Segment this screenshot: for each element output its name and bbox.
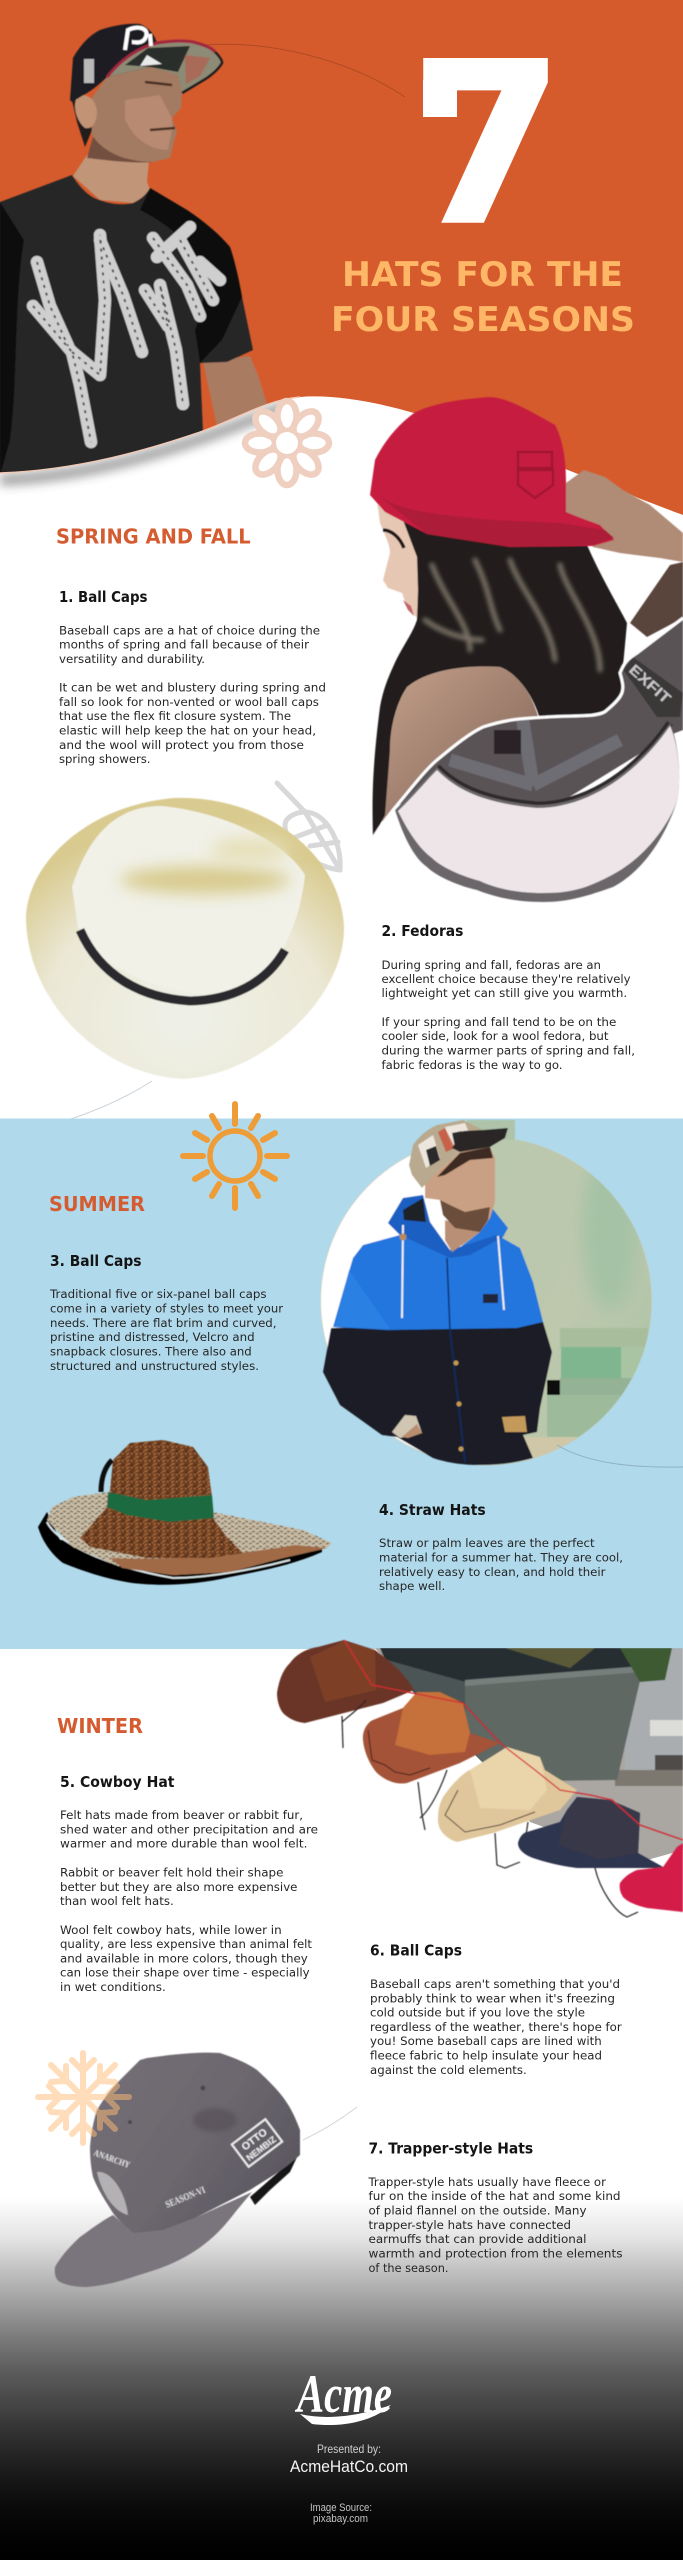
heading: 5. cowboy hat: 5. Cowboy Hat bbox=[60, 1773, 174, 1791]
photo: woman in red cap bbox=[370, 397, 683, 902]
hair highlights bbox=[425, 560, 600, 670]
jacket upper blue bbox=[333, 1195, 543, 1330]
cowboy hats on a line bbox=[277, 1640, 683, 1917]
body text: ball caps: It can be wet and blustery during spring and bbox=[59, 682, 326, 695]
hero title: HATS FOR THE bbox=[342, 255, 623, 295]
jacket placket bbox=[447, 1258, 465, 1462]
body text: straw hats: Straw or palm leaves are the perfect bbox=[379, 1537, 595, 1550]
body text: straw hats: material for a summer hat. They are cool, bbox=[379, 1551, 623, 1564]
body text: fedoras: fabric fedoras is the way to go. bbox=[382, 1059, 562, 1072]
cap logo bbox=[125, 28, 151, 50]
green wall bbox=[462, 1139, 652, 1464]
man's face bbox=[90, 67, 182, 162]
body text: trapper-style hats: earmuffs that can provide additional bbox=[368, 2233, 586, 2246]
cap eyelets bbox=[128, 2086, 206, 2124]
decorative arc right bbox=[557, 1445, 683, 1467]
man's ear bbox=[75, 95, 97, 128]
fedora brim bbox=[26, 798, 344, 1079]
hat 1 brown bbox=[277, 1640, 414, 1723]
cap dark brim bbox=[452, 1128, 508, 1152]
body text: fedoras: lightweight yet can still give you warmth. bbox=[382, 987, 627, 1000]
body text: trapper-style hats: Trapper-style hats usually have fleece or bbox=[367, 2176, 606, 2189]
hat 3 beige bbox=[438, 1747, 577, 1842]
fedora ribbon band bbox=[80, 930, 285, 1001]
grey cap season text: SEASON-VI bbox=[164, 2185, 207, 2211]
body text: winter ball caps bbox=[370, 1978, 622, 2077]
body text: ball caps: spring showers. bbox=[59, 753, 150, 766]
body text: winter ball caps: regardless of the weather, there's hope for bbox=[370, 2021, 622, 2034]
body text: winter ball caps: against the cold elements. bbox=[370, 2064, 527, 2077]
presented by: Presented by: bbox=[317, 2442, 381, 2456]
jacket lower black bbox=[323, 1322, 552, 1465]
black t-shirt bbox=[0, 175, 253, 476]
hat 1 chin strap bbox=[342, 1700, 366, 1748]
jacket pocket patch bbox=[483, 1294, 498, 1303]
photo: straw hat bbox=[38, 1440, 332, 1585]
flexfit band label: EXFIT bbox=[625, 661, 674, 707]
hat 5 red bbox=[620, 1843, 683, 1912]
body text: ball caps: that use the flex fit closure system. The bbox=[59, 710, 291, 723]
body text: fedoras bbox=[382, 959, 635, 1072]
body text: summer ball caps: snapback closures. There also and bbox=[50, 1346, 252, 1359]
body text: fedoras: If your spring and fall tend to be on the bbox=[382, 1016, 616, 1029]
hero orange background bbox=[0, 0, 683, 515]
body text: trapper-style hats: fur on the inside of the hat and some kind bbox=[368, 2190, 620, 2203]
website: AcmeHatCo.com bbox=[290, 2457, 408, 2476]
string toggle bbox=[400, 1234, 406, 1240]
woman's hand bbox=[566, 470, 683, 562]
body text: ball caps: fall so look for non-vented or wool ball caps bbox=[59, 696, 319, 709]
body text: summer ball caps: come in a variety of styles to meet your bbox=[50, 1302, 283, 1316]
grey cap shadow bbox=[250, 2155, 298, 2205]
t-shirt script lettering bbox=[33, 227, 220, 442]
red rope bbox=[344, 1640, 683, 1840]
straw hat shadow bbox=[38, 1512, 322, 1585]
wave rim line bbox=[0, 397, 300, 473]
woman's raised arm bbox=[630, 562, 683, 637]
panel: spring and fall bbox=[0, 397, 683, 1132]
man's neck bbox=[445, 1220, 480, 1252]
photo: man in blue jacket (circle) bbox=[320, 1120, 667, 1470]
icon: flower bbox=[245, 401, 329, 485]
hat 2 zig-zag stitch bbox=[368, 1730, 430, 1775]
man's cap crown bbox=[70, 24, 157, 102]
man's arm bbox=[203, 356, 267, 426]
heading: 6. ball caps: 6. Ball Caps bbox=[370, 1942, 462, 1960]
section title: summer: SUMMER bbox=[49, 1192, 145, 1216]
hat 2 chin strap bbox=[418, 1770, 447, 1830]
section title: winter: WINTER bbox=[57, 1714, 143, 1738]
decorative arc bbox=[205, 44, 405, 97]
straw hat green band bbox=[107, 1492, 214, 1522]
crown highlight bbox=[193, 2108, 237, 2132]
body text: ball caps: months of spring and fall because of their bbox=[59, 639, 309, 652]
circle background bbox=[320, 1137, 652, 1465]
hero title: FOUR SEASONS bbox=[331, 300, 635, 340]
body text: cowboy hat bbox=[60, 1809, 318, 1994]
gold watch bbox=[502, 1416, 527, 1432]
heading: 4. straw hats: 4. Straw Hats bbox=[379, 1501, 486, 1519]
grey cap brim bbox=[55, 2192, 252, 2287]
photo: man in black tee and cap bbox=[0, 24, 267, 476]
man's cap brim bbox=[107, 41, 222, 93]
jacket strings bbox=[402, 1225, 504, 1318]
grey cap patch: NEMBIZ bbox=[244, 2134, 278, 2163]
heading: 1. ball caps: 1. Ball Caps bbox=[59, 588, 148, 606]
body text: ball caps: versatility and durability. bbox=[59, 653, 205, 666]
brim lower rim bbox=[110, 1545, 327, 1575]
body text: winter ball caps: probably think to wear when it's freezing bbox=[370, 1993, 615, 2006]
sweatband with size tag bbox=[623, 657, 683, 717]
panel: hero header bbox=[0, 0, 683, 515]
heading: 2. fedoras: 2. Fedoras bbox=[382, 922, 463, 940]
straw hat brim bbox=[47, 1492, 332, 1575]
body text: cowboy hat: shed water and other precipitation and are bbox=[60, 1824, 318, 1837]
image source: Image Source: bbox=[310, 2502, 372, 2514]
body text: cowboy hat: and available in more colors, though they bbox=[60, 1953, 308, 1966]
body text: straw hats: shape well. bbox=[379, 1580, 445, 1593]
cap inner tag bbox=[494, 730, 521, 754]
body text: cowboy hat: Wool felt cowboy hats, while lower in bbox=[60, 1924, 282, 1937]
cap panel stitches bbox=[450, 715, 620, 785]
patterned cap crown bbox=[409, 1120, 490, 1188]
grey cap crown bbox=[90, 2053, 300, 2233]
heading: 7. trapper-style hats: 7. Trapper-style Hats bbox=[368, 2140, 533, 2158]
body text: fedoras: during the warmer parts of spring and fall, bbox=[382, 1044, 635, 1058]
man's neck bbox=[73, 150, 151, 203]
body text: summer ball caps: Traditional five or six-panel ball caps bbox=[49, 1288, 267, 1301]
body text: fedoras: cooler side, look for a wool fedora, but bbox=[382, 1030, 609, 1043]
man's face bbox=[425, 1147, 495, 1232]
body text: trapper-style hats: warmth and protection from the elements bbox=[368, 2248, 623, 2261]
hat 3 zig-zag stitch bbox=[445, 1790, 535, 1832]
panel: summer bbox=[0, 1104, 683, 1649]
body text: cowboy hat: Felt hats made from beaver or rabbit fur, bbox=[60, 1809, 303, 1822]
red cap brim bbox=[378, 495, 614, 547]
body text: summer ball caps: pristine and distressed, Velcro and bbox=[50, 1331, 255, 1344]
summer blue background bbox=[0, 1118, 683, 1649]
photo: street planter behind hats bbox=[375, 1648, 683, 1868]
body text: winter ball caps: you! Some baseball caps are lined with bbox=[370, 2035, 602, 2048]
big number 7: 7 bbox=[409, 14, 565, 275]
hero title bbox=[331, 255, 635, 340]
panel: winter bbox=[0, 1640, 683, 2560]
grey cap patch bbox=[232, 2119, 282, 2167]
grey cap patch: OTTO bbox=[239, 2126, 270, 2153]
hat 3 chin strap bbox=[495, 1822, 528, 1868]
image source bbox=[310, 2502, 372, 2525]
sweat band along brim bbox=[437, 723, 670, 805]
woman's bare back bbox=[382, 666, 540, 822]
body text: cowboy hat: warmer and more durable than wool felt. bbox=[60, 1838, 307, 1851]
panel: footer gradient bbox=[0, 2190, 683, 2560]
icon: leaf bbox=[277, 783, 340, 870]
panel: footer branding bbox=[290, 2364, 408, 2525]
heading: 3. ball caps: 3. Ball Caps bbox=[50, 1252, 142, 1270]
body text: winter ball caps: Baseball caps aren't something that you'd bbox=[370, 1978, 620, 1991]
decorative arc near trapper heading bbox=[303, 2107, 357, 2140]
body text: cowboy hat: in wet conditions. bbox=[60, 1981, 166, 1994]
photo: straw fedora bbox=[26, 798, 344, 1079]
white rim edge bbox=[47, 1522, 290, 1578]
body text: straw hats bbox=[379, 1537, 623, 1593]
body text: cowboy hat: quality, are less expensive than animal felt bbox=[60, 1938, 313, 1951]
body text: winter ball caps: cold outside but if you love the style bbox=[370, 2007, 585, 2020]
cap underside interior bbox=[397, 618, 683, 815]
grey cap emblem bbox=[92, 2147, 132, 2215]
body text: cowboy hat: better but they are also more expensive bbox=[60, 1881, 298, 1894]
straw hat crown bbox=[80, 1440, 243, 1558]
straw hat strap bbox=[101, 1460, 112, 1492]
body text: ball caps bbox=[59, 624, 326, 766]
wall gap between arm and body bbox=[369, 1358, 377, 1384]
photo: grey ball cap bbox=[55, 2053, 300, 2287]
body text: fedoras: excellent choice because they're relatively bbox=[382, 973, 631, 986]
body text: cowboy hat: Rabbit or beaver felt hold their shape bbox=[60, 1867, 284, 1880]
woman's hair bbox=[373, 520, 627, 838]
icon: sun bbox=[183, 1104, 287, 1208]
body text: trapper-style hats: of the season. bbox=[368, 2262, 448, 2275]
body text: trapper-style hats: of plaid flannel on the outside. Many bbox=[368, 2205, 587, 2218]
hat 2 orange bbox=[363, 1692, 500, 1783]
decorative arc left bbox=[0, 1081, 152, 1132]
wave shadow bbox=[0, 407, 285, 480]
wave divider bbox=[373, 618, 683, 838]
cap shield logo bbox=[518, 452, 553, 498]
lettering texture bbox=[33, 235, 213, 442]
body text: trapper-style hats: trapper-style hats have connected bbox=[368, 2219, 571, 2232]
body text: ball caps: elastic will help keep the hat on your head, bbox=[59, 724, 316, 737]
body text: cowboy hat: than wool felt hats. bbox=[60, 1895, 174, 1908]
woman's face bbox=[377, 500, 440, 618]
red cap crown bbox=[370, 397, 614, 547]
body text: fedoras: During spring and fall, fedoras are an bbox=[382, 959, 601, 972]
fedora crown bbox=[72, 806, 305, 994]
jacket snaps bbox=[454, 1360, 464, 1452]
back hair bbox=[72, 100, 92, 147]
body text: winter ball caps: fleece fabric to help insulate your head bbox=[370, 2050, 602, 2063]
hood lining bbox=[403, 1198, 426, 1222]
body text: cowboy hat: can lose their shape over time - especially bbox=[60, 1967, 310, 1980]
hat 4 chin strap bbox=[595, 1868, 638, 1917]
icon: snowflake bbox=[38, 2053, 129, 2143]
image source: pixabay.com bbox=[313, 2513, 368, 2525]
cap side patch bbox=[84, 59, 94, 83]
body text: straw hats: relatively easy to clean, and hold their bbox=[379, 1566, 606, 1579]
body text: summer ball caps: needs. There are flat brim and curved, bbox=[50, 1317, 276, 1330]
hat 4 navy bbox=[518, 1797, 665, 1868]
body text: ball caps: Baseball caps are a hat of choice during the bbox=[59, 624, 320, 637]
body text: summer ball caps bbox=[49, 1288, 283, 1373]
body text: summer ball caps: structured and unstructured styles. bbox=[50, 1360, 259, 1373]
logo: Acme: Acme bbox=[295, 2364, 392, 2424]
grey cap emblem: ANARCHY bbox=[92, 2147, 132, 2170]
section title: spring and fall: SPRING AND FALL bbox=[56, 524, 251, 548]
body text: ball caps: and the wool will protect you from those bbox=[59, 739, 304, 752]
wrist and hand bbox=[392, 1415, 422, 1438]
body text: trapper-style hats bbox=[367, 2176, 623, 2275]
cap underbrim bbox=[395, 723, 679, 902]
